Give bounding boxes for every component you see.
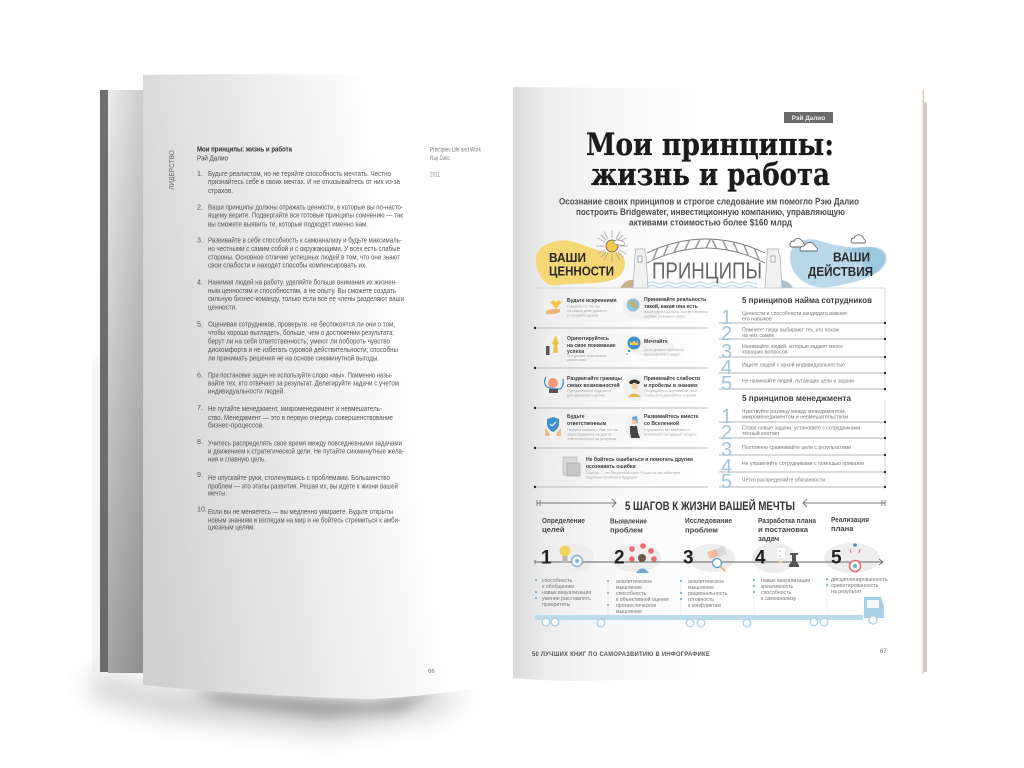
value: accept reality: Ваши мысли должны соответствовать <box>644 310 708 314</box>
separators <box>534 327 708 488</box>
value: dream: Мечтайте <box>644 338 668 345</box>
value: push boundaries: Раздвигайте границы <box>567 375 622 382</box>
value: be responsible: Будьте <box>567 414 585 420</box>
numbered principles list: вы сможете выявить те, которые подходят именно вам. <box>208 219 368 228</box>
step numbers: 5 <box>831 548 842 568</box>
value: push boundaries: для движения к целям <box>567 394 605 398</box>
right page sheet <box>513 87 922 681</box>
separators and dots <box>719 323 885 487</box>
numbered principles list: Не путайте менеджмент, микроменеджмент и невмешатель- <box>208 404 383 413</box>
value: be responsible: Неудача связана с тем, что вы <box>567 428 619 432</box>
numbered principles list: Развивайте в себе способность к самоанализу и будьте максималь- <box>208 236 403 244</box>
numbered principles list: 3. <box>197 236 203 244</box>
hills <box>620 280 793 288</box>
step blobs <box>556 543 880 573</box>
hiring numbers: 1 <box>721 307 732 329</box>
skills: step four: навык визуализации <box>761 578 810 584</box>
numbered principles list: 7. <box>197 403 203 412</box>
value: own understanding of success: Ориентируйтесь <box>567 335 609 342</box>
value: own understanding of success <box>543 333 616 363</box>
numbered principles list: Если вы не меняетесь — вы медленно умираете. Будьте открыты <box>208 507 393 516</box>
step headings <box>542 515 869 543</box>
value: evolve with universe: Развивайтесь вместе <box>644 413 699 420</box>
numbered principles list: ли принимать решения не на основе сиюминутной выгоды. <box>208 354 379 363</box>
numbered principles list: 4. <box>197 278 203 286</box>
blue blob: your actions <box>790 239 887 287</box>
skills: step two: к объективной оценке <box>616 596 669 603</box>
value: push boundaries <box>543 373 622 399</box>
step headings: проблем <box>685 526 718 534</box>
skills: step two: способность <box>616 591 647 597</box>
yellow blob: your values: ЦЕННОСТИ <box>549 264 614 278</box>
blue blob: your actions: ВАШИ <box>833 250 870 264</box>
numbered principles list: 10. <box>197 504 207 514</box>
yellow blob: your values <box>536 240 625 285</box>
skills: step two: мышление <box>616 609 642 615</box>
main title: жизнь и работа <box>591 157 830 193</box>
value: be sincere <box>543 298 617 320</box>
author tag <box>784 112 833 123</box>
value: do not fear mistakes: Ошибка — это бесценный опыт. Решая их, вы избегаете <box>586 471 680 475</box>
skills: step two <box>616 579 669 615</box>
step numbers <box>541 548 842 568</box>
skills: step one: способность <box>542 578 573 584</box>
numbered principles list <box>197 169 405 532</box>
book source details: 2011 <box>430 172 440 178</box>
numbered principles list: Ваши принципы должны отражать ценности, в которые вы по-насто- <box>208 202 404 212</box>
value: accept reality: картине реального мира <box>644 314 685 318</box>
subtitle: построить Bridgewater, инвестиционную компанию, управляющую <box>576 207 845 218</box>
value: accept reality <box>622 296 708 320</box>
right page edge strips <box>922 90 927 674</box>
hiring numbers: 5 <box>721 373 732 395</box>
step headings: Реализация <box>831 515 869 524</box>
numbered principles list: вайте тех, кто отвечает за результат. Делегируйте задачи с учетом <box>208 379 399 388</box>
numbered principles list: Оценивая сотрудников, проверьте: не беспокоятся ли они о том, <box>208 320 395 329</box>
management numbers: 5 <box>721 471 732 493</box>
skills: step five <box>831 577 888 595</box>
numbered principles list: и движением к стратегической цели. Не путайте сиюминутные жела- <box>208 447 405 456</box>
truck wheels <box>542 616 877 627</box>
step headings: проблем <box>610 526 643 534</box>
right page number: 67 <box>880 649 887 655</box>
step headings: целей <box>542 525 565 534</box>
numbered principles list: При постановке задач не используйте слово «мы». Поименно назы- <box>208 370 392 380</box>
skills: step four: способность <box>761 590 792 596</box>
management principles: тесный контакт <box>742 430 780 437</box>
value: be responsible: перекладываете на других <box>567 432 612 436</box>
icon: person with problems <box>629 543 657 573</box>
step headings: задач <box>758 534 779 543</box>
management numbers: 2 <box>721 422 732 444</box>
step headings: плана <box>831 524 854 533</box>
vertical section label: ЛИДЕРСТВО <box>167 150 176 190</box>
value: push boundaries: своих возможностей <box>567 382 620 389</box>
value: dream: Дело должно приносить <box>644 348 684 352</box>
management principles: Не управляйте сотрудниками с помощью приказов <box>742 460 864 467</box>
right tower <box>765 249 782 288</box>
hiring principles: Помните: люди выбирают тех, кто похож <box>742 328 839 334</box>
management principles: микроменеджментом и невмешательством <box>742 414 848 420</box>
value: evolve with universe <box>625 413 699 440</box>
value: accept weakness: Принимайте слабости <box>644 375 700 382</box>
hiring numbers: 3 <box>721 341 732 363</box>
step numbers: 4 <box>755 548 766 568</box>
numbered principles list: ство. Менеджмент — это в первую очередь совершенствование <box>208 413 393 422</box>
skills: step three: к конфликтам <box>688 603 721 609</box>
numbered principles list: ценности. <box>208 302 237 312</box>
value: do not fear mistakes <box>557 455 693 481</box>
icon: clouds <box>790 235 865 251</box>
step headings: Разработка плана <box>758 516 817 525</box>
numbered principles list: Будьте реалистом, но не теряйте способность мечтать. Честно <box>208 169 391 178</box>
icon: chess rook plan <box>777 548 799 567</box>
bridge illustration <box>620 239 793 288</box>
management numbers: 1 <box>721 406 732 428</box>
skills: step two: аналитическое <box>616 579 652 585</box>
numbered principles list: мечты. <box>208 489 227 498</box>
management principles: Чувствуйте разницу между менеджментом, <box>742 408 846 415</box>
numbered principles list: новым знаниям и взглядам на мир и не бойтесь стремиться к амби- <box>208 516 401 524</box>
skills: step one: приоритеты <box>542 602 571 608</box>
right page <box>513 87 927 681</box>
numbered principles list: дискомфорта и не избегать суровой действительности; способны <box>208 345 398 354</box>
numbered principles list: бизнес-процессов. <box>208 421 264 430</box>
numbered principles list: ным ценностям и способностям, а не опыту. Вы сможете создать <box>208 286 396 295</box>
truck cab <box>864 597 884 618</box>
icon: target and figures <box>850 543 860 572</box>
main title: Мои принципы: <box>586 127 834 163</box>
numbered principles list: циозным целям. <box>208 523 255 532</box>
management principles: Постоянно сравнивайте цели с результатами <box>742 444 851 451</box>
value: be sincere: Говорите то, что вы <box>567 304 600 308</box>
skills: step three: мышление <box>688 585 714 591</box>
hiring principles <box>742 311 854 384</box>
icon: lightbulb and target <box>560 546 582 566</box>
value: evolve with universe: Вселенной как единый процесс <box>644 432 697 436</box>
skills: step one: навык визуализации <box>542 590 591 596</box>
timeline arrow <box>535 559 883 565</box>
hiring principles: Ищите людей с яркой индивидуальностью <box>742 362 845 368</box>
drop shadow under book <box>92 360 470 732</box>
footer book title: 50 ЛУЧШИХ КНИГ ПО САМОРАЗВИТИЮ В ИНФОГРАФИКЕ <box>532 651 710 658</box>
truck bed <box>535 615 863 620</box>
hiring principles: Не нанимайте людей, путающих цели и задачи <box>742 378 854 384</box>
value: own understanding of success: Что делает счастливым <box>567 354 607 358</box>
skills: step one: к обобщению <box>542 584 574 590</box>
value: accept weakness <box>624 375 700 401</box>
step numbers: 3 <box>683 548 694 568</box>
hiring numbers <box>721 307 732 395</box>
numbered principles list: свои слабости и находят способы компенсировать их. <box>208 261 367 270</box>
skills: step two: мышление <box>616 585 642 591</box>
bridge word: ПРИНЦИПЫ <box>652 258 762 284</box>
step headings: и постановка <box>758 525 809 534</box>
book source details <box>430 146 481 178</box>
numbered principles list: стороны. Основное отличие успешных людей в том, что они знают <box>208 252 401 261</box>
book heading: Рэй Далио <box>197 154 228 162</box>
numbered principles list: но честными с самим собой и с окружающими. У всех есть слабые <box>208 244 400 253</box>
subtitle: активами стоимостью более $160 млрд <box>629 218 792 228</box>
section title: five steps: 5 ШАГОВ К ЖИЗНИ ВАШЕЙ МЕЧТЫ <box>625 498 795 513</box>
value: accept weakness: слабости и двигайтесь к целям <box>644 394 696 398</box>
numbered principles list: проблем — это этапы развития. Решая их, вы идете к жизни вашей <box>208 482 398 490</box>
main title <box>586 127 834 193</box>
management numbers: 4 <box>721 456 732 478</box>
value: accept reality: такой, какая она есть <box>644 303 698 310</box>
value: accept weakness: и пробелы в знаниях <box>644 382 698 389</box>
truck illustration <box>535 597 884 627</box>
value: do not fear mistakes: подобных проблем в будущем <box>586 476 637 480</box>
skills: step four: к самоанализу <box>761 596 797 602</box>
skills: step three: готовность <box>688 597 714 603</box>
value: be sincere: и слушайте других <box>567 314 598 318</box>
yellow blob: your values: ВАШИ <box>549 251 586 265</box>
value: dream <box>626 336 684 356</box>
value: accept weakness: Обсуждайте и оценивайте свои <box>644 389 697 393</box>
skills: step four <box>761 578 810 602</box>
book source details: Principles Life and Work <box>430 146 481 154</box>
numbered principles list: 1. <box>197 169 203 178</box>
step numbers: 1 <box>541 548 552 568</box>
subtitle: Осознание своих принципов и строгое следование им помогло Рэю Далио <box>559 196 859 208</box>
left page sheet <box>143 74 513 699</box>
panel frame: values and hiring <box>535 288 885 487</box>
skills: step one <box>542 578 591 608</box>
icon: sun with cloud <box>596 230 628 262</box>
skills: step two: прогностическое <box>616 603 656 609</box>
value: be sincere: на самом деле думаете, <box>567 309 608 313</box>
panel: hiring and management <box>719 295 885 493</box>
value: accept reality: Принимайте реальность <box>644 296 706 303</box>
step headings: Выявление <box>610 516 647 526</box>
numbered principles list: чтобы хорошо выглядеть, больше, чем о достижении результата; <box>208 328 394 337</box>
skills: step three: аналитическое <box>688 579 724 585</box>
numbered principles list: берут ли на себя ответственность; умеют ли побороть чувство <box>208 336 390 346</box>
arch <box>647 239 765 263</box>
skills: step five: дисциплинированность <box>831 577 888 583</box>
numbered principles list: страхов. <box>208 186 233 195</box>
management principles: Ставя новые задачи, установите с сотрудниками <box>742 426 860 432</box>
management heading: 5 принципов менеджмента <box>742 393 851 403</box>
numbered principles list: 2. <box>197 202 203 212</box>
numbered principles list: ящему верите. Подвергайте все готовые принципы сомнению — так <box>208 211 404 220</box>
step headings: Определение <box>542 516 585 525</box>
numbered principles list: ния и главную цель. <box>208 455 266 464</box>
skills: step three: рациональность <box>688 591 728 597</box>
bullets and stems <box>536 579 827 616</box>
book heading <box>197 144 293 162</box>
left page number: 66 <box>428 669 435 675</box>
water <box>648 282 757 288</box>
value: evolve with universe: Стремитесь вы зависите от <box>644 428 690 432</box>
decorative title arrow right <box>803 499 885 507</box>
numbered principles list: 9. <box>197 470 203 479</box>
left tower <box>633 249 648 288</box>
management principles <box>742 408 864 484</box>
step numbers: 2 <box>614 548 625 568</box>
hiring principles: его навыков <box>742 316 772 322</box>
skills: step five: ориентированность <box>831 583 879 589</box>
blue blob: your actions: ДЕЙСТВИЯ <box>808 264 873 279</box>
numbered principles list: индивидуальности людей. <box>208 387 285 396</box>
numbered principles list: сильную бизнес-команду, только если все ее члены разделяют ваши <box>208 294 404 303</box>
management numbers <box>721 406 732 493</box>
skills: step one: умение расставлять <box>542 596 591 602</box>
subtitle <box>559 196 859 228</box>
skills: step five: на результат <box>831 589 862 595</box>
decorative title arrow left <box>537 499 616 507</box>
numbered principles list: 8. <box>197 437 203 446</box>
skills: step three <box>688 579 728 609</box>
panel: values list <box>534 296 708 488</box>
value: dream: вдохновение и смысл <box>644 352 680 356</box>
book back and spine edge <box>100 90 143 673</box>
author tag: Рэй Далио <box>792 114 825 122</box>
hiring principles: Ценности и способности кандидата важнее <box>742 311 847 317</box>
value: own understanding of success: именно вас <box>567 358 586 362</box>
step skill lists <box>536 577 888 616</box>
book source details: Ray Dalio <box>430 155 450 162</box>
numbered principles list: Учитесь распределять свое время между повседневными задачами <box>208 438 402 448</box>
numbered principles list: Не опускайте руки, столкнувшись с проблемами. Большинство <box>208 473 390 482</box>
hiring principles: Нанимайте людей, которые задают много <box>742 343 843 350</box>
book heading: Мои принципы: жизнь и работа <box>197 144 293 154</box>
management principles: Четко распределяйте обязанности <box>742 476 825 484</box>
value: be sincere: Будьте искренними <box>567 298 617 304</box>
management numbers: 3 <box>721 439 732 461</box>
hiring heading: 5 принципов найма сотрудников <box>742 295 872 305</box>
value: do not fear mistakes: осознавать ошибки <box>586 463 636 470</box>
hiring numbers: 2 <box>721 323 732 345</box>
numbered principles list: 5. <box>197 320 203 328</box>
value: push boundaries: Преодолевайте трудности <box>567 389 611 393</box>
numbered principles list: признайтесь себе в своих мечтах. И не отказывайтесь от них из-за <box>208 177 400 186</box>
icon: magnifier and documents <box>707 546 727 572</box>
numbered principles list: Нанимая людей на работу, уделяйте больше внимания их жизнен- <box>208 278 398 286</box>
hiring numbers: 4 <box>721 357 732 379</box>
hiring principles: на них самих <box>742 333 775 339</box>
left page <box>143 74 513 699</box>
numbered principles list: 6. <box>197 370 203 380</box>
value: be responsible: ответственность за результат <box>567 437 617 441</box>
value: do not fear mistakes: Не бойтесь ошибаться и помогать другим <box>586 456 693 463</box>
value: be responsible: ответственным <box>567 421 606 427</box>
skills: step four: креативность <box>761 584 794 590</box>
step headings: Исследование <box>685 516 732 525</box>
value: own understanding of success: на свое понимание <box>567 343 616 349</box>
value: evolve with universe: со Вселенной <box>644 420 679 427</box>
value: own understanding of success: успеха <box>567 349 584 355</box>
value: be responsible <box>543 414 619 441</box>
hiring principles: хороших вопросов <box>742 350 788 356</box>
